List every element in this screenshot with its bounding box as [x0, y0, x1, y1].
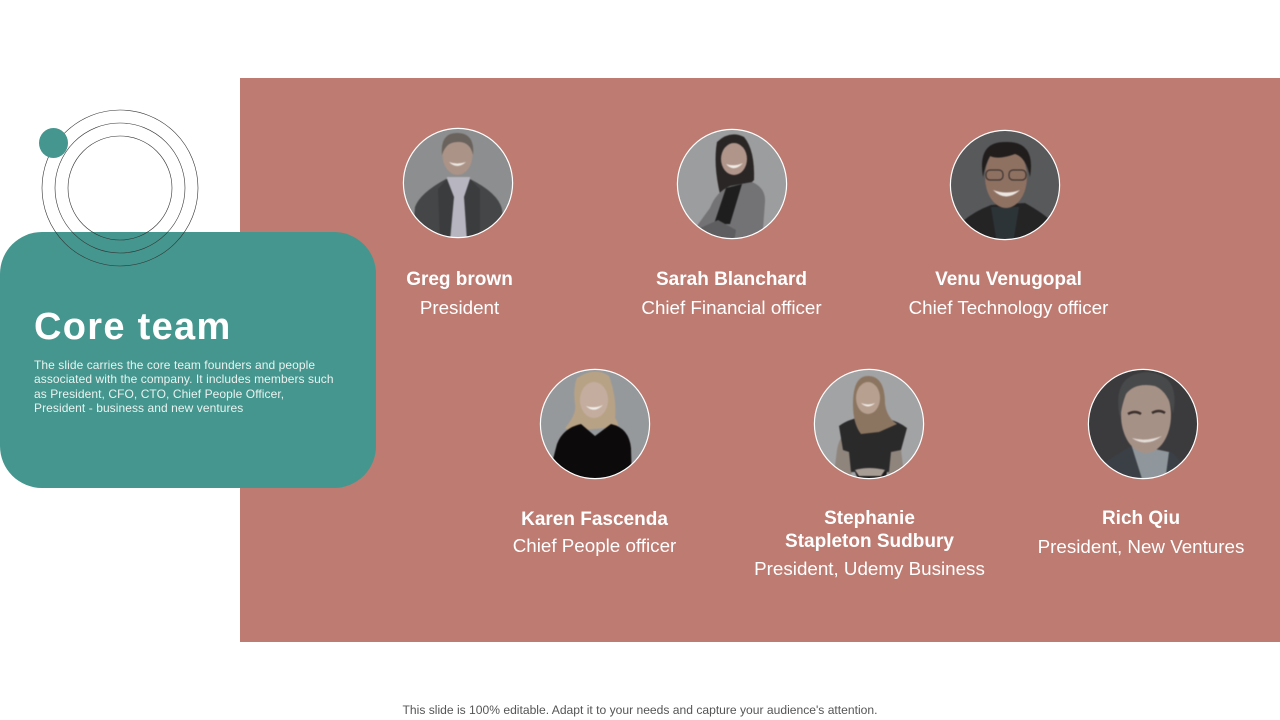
member: Sarah Blanchard [641, 269, 822, 318]
portrait: Venu Venugopal [950, 130, 1060, 240]
member: Stephanie Stapleton Sudbury: Stapleton Sudbury [785, 531, 954, 552]
portrait: Rich Qiu [1088, 368, 1198, 480]
description text: as President, CFO, CTO, Chief People Officer, [34, 387, 284, 401]
member: Venu Venugopal [909, 269, 1108, 318]
member: Rich Qiu [1038, 508, 1244, 557]
member: Rich Qiu: Rich Qiu [1102, 508, 1180, 529]
decorative concentric rings [42, 110, 198, 266]
member: Greg brown [406, 269, 513, 318]
teal accent dot [39, 128, 68, 158]
panel: teal title card [0, 232, 376, 488]
member: Greg brown: Greg brown [406, 269, 513, 290]
portrait: Stephanie Stapleton Sudbury [814, 368, 924, 480]
description text: The slide carries the core team founders and people [34, 358, 315, 372]
member: Rich Qiu: President, New Ventures [1038, 536, 1244, 557]
footer note: This slide is 100% editable. Adapt it to your needs and capture your audience's attention. [403, 703, 877, 717]
title: Core team [34, 306, 232, 348]
portrait: Sarah Blanchard [676, 128, 788, 240]
member: Karen Fascenda: Karen Fascenda [521, 509, 668, 530]
description text: President - business and new ventures [34, 401, 243, 415]
description text: associated with the company. It includes members such [34, 372, 334, 386]
member: Venu Venugopal: Venu Venugopal [935, 269, 1082, 290]
portrait: Greg brown [402, 128, 514, 238]
member: Greg brown: President [420, 297, 499, 318]
member: Stephanie Stapleton Sudbury: President, Udemy Business [754, 558, 985, 579]
member: Stephanie Stapleton Sudbury [754, 508, 985, 579]
panel: rose background [240, 78, 1280, 642]
member: Venu Venugopal: Chief Technology officer [909, 297, 1108, 318]
member: Stephanie Stapleton Sudbury: Stephanie [824, 508, 915, 529]
portrait: Karen Fascenda [540, 368, 650, 480]
description text [34, 358, 334, 415]
member: Sarah Blanchard: Chief Financial officer [641, 297, 822, 318]
member: Sarah Blanchard: Sarah Blanchard [656, 269, 807, 290]
member: Karen Fascenda: Chief People officer [513, 535, 676, 556]
member: Karen Fascenda [513, 509, 676, 556]
